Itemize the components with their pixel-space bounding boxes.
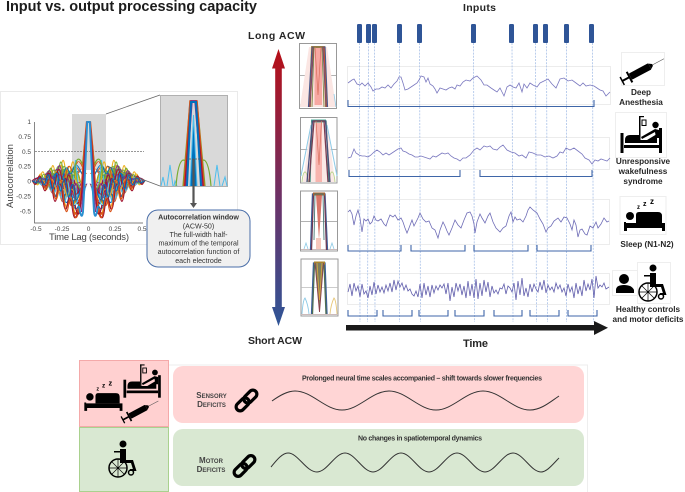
fast wave xyxy=(271,453,559,472)
mini autocorrelation panel: long ACW xyxy=(300,44,336,108)
mini autocorrelation panel: unresponsive xyxy=(300,118,337,183)
label: healthy controls and motor deficits: and motor deficits xyxy=(613,315,684,324)
gradient ACW arrow xyxy=(272,49,285,326)
icon: chain link xyxy=(232,454,257,478)
label: sleep: Sleep (N1-N2) xyxy=(620,240,674,249)
sensory label: Sensory xyxy=(196,391,227,400)
EEG trace: deep anesthesia xyxy=(348,76,610,96)
x tick labels: 0.25 xyxy=(109,226,122,233)
label: unresponsive wakefulness syndrome: wakefulness xyxy=(618,167,668,176)
callout: autocorrelation window: each electrode xyxy=(175,257,222,265)
axes xyxy=(34,122,143,223)
icon: healthy person and wheelchair user xyxy=(612,262,670,304)
y tick labels: 0.75 xyxy=(18,134,31,141)
label: long ACW: Long ACW xyxy=(248,30,305,42)
zoomed inset of autocorrelation peak xyxy=(160,96,228,186)
icon: hospital bed xyxy=(616,112,666,158)
brackets: unresponsive wakefulness windows xyxy=(349,170,592,176)
panel: motor icon xyxy=(80,428,168,492)
panel: autocorrelation chart xyxy=(0,92,238,244)
callout: autocorrelation window: maximum of the temporal xyxy=(158,240,239,248)
y tick labels: -0.25 xyxy=(16,194,31,200)
panel: sensory icons xyxy=(80,360,168,426)
EEG trace: unresponsive wakefulness xyxy=(348,145,610,164)
x tick labels: -0.5 xyxy=(30,226,42,233)
callout: autocorrelation window: (ACW-50) xyxy=(183,222,214,230)
brackets: healthy control windows xyxy=(348,310,597,316)
zoom connector lines xyxy=(106,95,160,186)
panel: motor deficits xyxy=(173,429,584,486)
input dashed guide lines xyxy=(360,43,594,322)
time arrow xyxy=(346,321,608,335)
icon: chain link xyxy=(234,388,259,413)
callout: autocorrelation window: The full-width half- xyxy=(170,231,228,239)
label: inputs: Inputs xyxy=(463,2,496,14)
label: short ACW: Short ACW xyxy=(248,335,302,347)
outer frame lines of lower section xyxy=(168,365,588,492)
x tick labels: -0.25 xyxy=(55,226,70,233)
input stimulus bars xyxy=(357,24,594,43)
y tick labels xyxy=(16,119,31,216)
icon: sleeping person xyxy=(620,196,666,234)
half-maximum line xyxy=(35,150,144,152)
bracket: deep anesthesia windows xyxy=(348,100,594,106)
label: unresponsive wakefulness syndrome: syndrome xyxy=(623,177,663,186)
label: healthy controls and motor deficits: Healthy controls xyxy=(616,305,681,314)
mini autocorrelation panel: healthy xyxy=(301,259,338,316)
y tick labels: -0.5 xyxy=(20,208,31,216)
autocorrelation traces xyxy=(32,122,145,218)
label: unresponsive wakefulness syndrome: Unresponsive xyxy=(616,157,671,166)
mini autocorrelation panel: sleep xyxy=(300,191,338,251)
label: deep anesthesia: Deep xyxy=(631,88,651,97)
callout: autocorrelation window xyxy=(147,210,250,267)
x tick labels: 0.5 xyxy=(137,226,147,233)
EEG trace: healthy controls xyxy=(348,276,609,301)
motor caption: No changes in spatiotemporal dynamics xyxy=(358,436,482,442)
callout: autocorrelation window: autocorrelation function of xyxy=(158,248,239,256)
y tick labels: 0.5 xyxy=(22,149,31,156)
y tick labels: 0.25 xyxy=(18,164,31,170)
slow wave xyxy=(272,391,559,410)
icon: syringe xyxy=(619,52,667,87)
motor label: Motor xyxy=(199,456,224,465)
motor label: Deficits xyxy=(197,465,225,474)
sensory label: Deficits xyxy=(197,400,226,409)
label: deep anesthesia: Anesthesia xyxy=(619,98,663,107)
x tick labels: 0 xyxy=(87,226,91,233)
highlighted ACW region xyxy=(72,114,106,170)
y axis label: Autocorrelation xyxy=(5,144,16,208)
EEG trace: sleep xyxy=(348,207,609,238)
callout: autocorrelation window: Autocorrelation window xyxy=(158,214,239,222)
sensory caption: Prolonged neural time scales accompanied – shift towards slower frequencies xyxy=(302,376,542,382)
panel: sensory deficits xyxy=(173,366,584,423)
label: time: Time xyxy=(463,338,488,350)
y tick labels: 1 xyxy=(27,119,31,126)
arrow: inset to callout xyxy=(190,159,197,208)
trace background boxes xyxy=(348,66,610,304)
brackets: sleep windows xyxy=(348,245,591,251)
y tick labels: 0 xyxy=(27,178,31,186)
x tick labels xyxy=(30,226,147,233)
x axis label: Time Lag (seconds) xyxy=(49,232,129,243)
